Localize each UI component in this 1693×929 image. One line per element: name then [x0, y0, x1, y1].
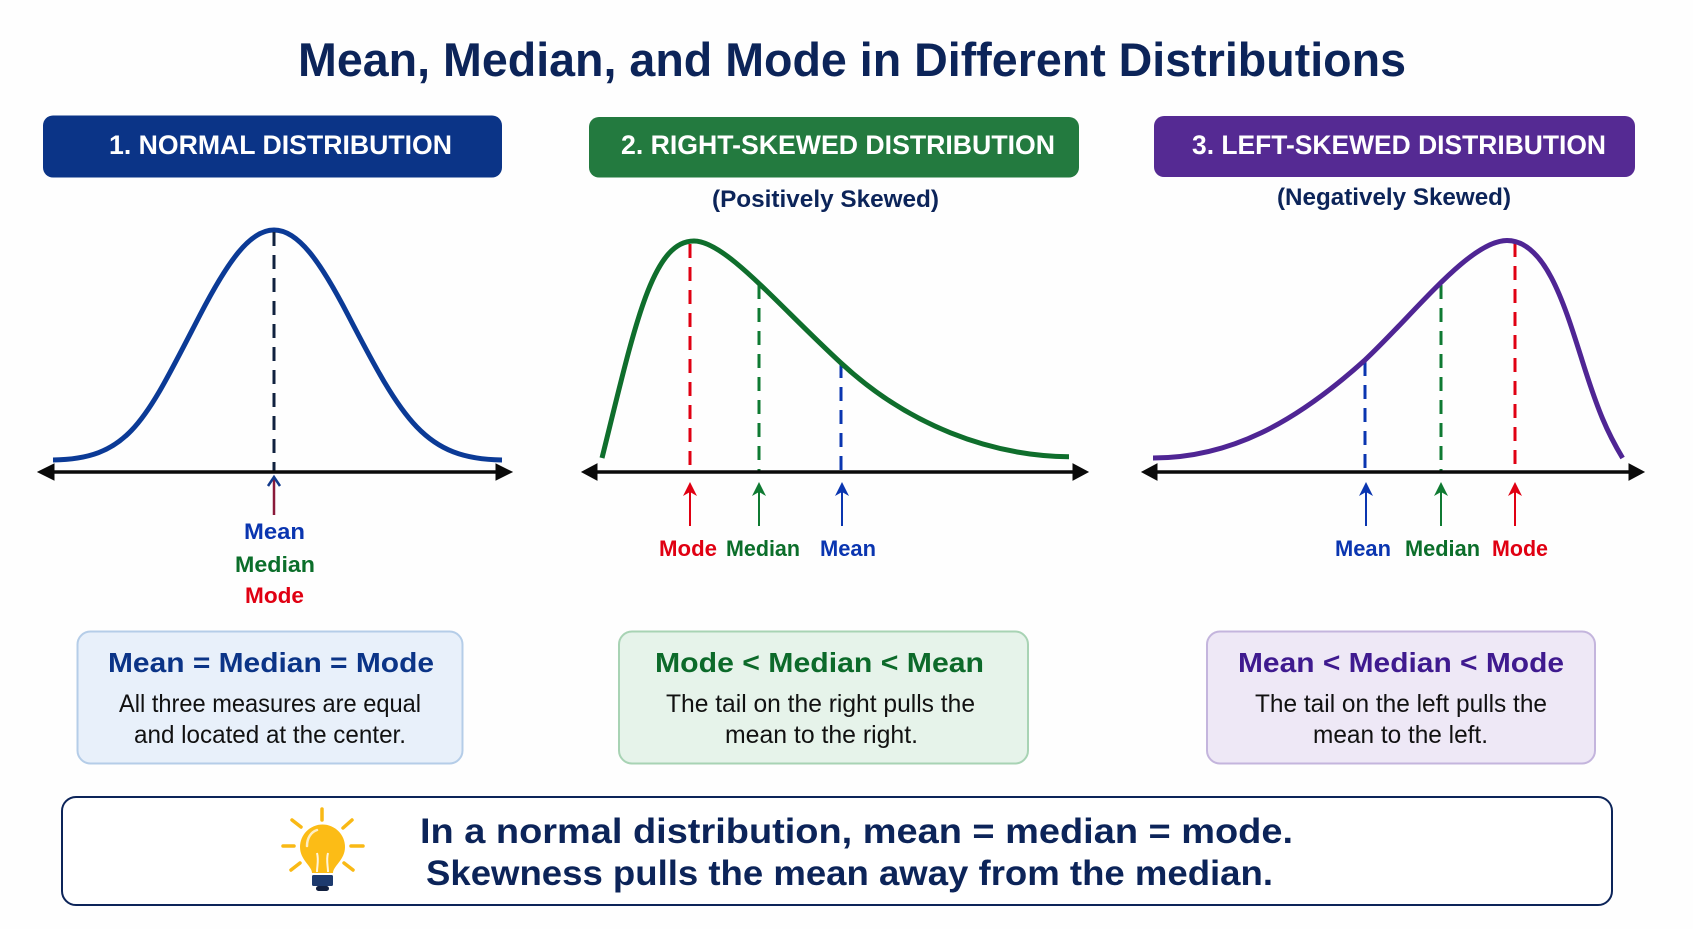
icon: light bulb: [283, 809, 363, 891]
labels: mean median mode: Median: [1405, 536, 1480, 561]
panel: left-skewed distribution: [1142, 116, 1644, 764]
chart: left-skewed curve: [1142, 240, 1644, 480]
callout: mode less than median less than mean: Mode < Median < Mean: [655, 647, 984, 678]
labels: mode median mean: [659, 536, 876, 561]
callout: mean less than median less than mode: mean to the left.: [1313, 721, 1488, 749]
callout: mode less than median less than mean: mean to the right.: [725, 721, 918, 749]
heading: normal distribution: 1. NORMAL DISTRIBUTION: [109, 130, 452, 160]
labels: mode median mean: Mode: [659, 536, 717, 561]
text: takeaway message: Skewness pulls the mean away from the median.: [426, 854, 1273, 893]
heading: right-skewed distribution: [589, 117, 1079, 178]
heading: normal distribution: [43, 116, 502, 178]
heading: left-skewed distribution: [1154, 116, 1635, 177]
callout: mean equals median equals mode: All three measures are equal: [119, 690, 421, 718]
labels: mean median mode: Mean: [244, 519, 305, 544]
callout: mean less than median less than mode: The tail on the left pulls the: [1255, 690, 1547, 718]
title: Mean, Median, and Mode in Different Distributions: [298, 33, 1406, 86]
callout: mode less than median less than mean: [619, 632, 1028, 764]
banner: key takeaway: [62, 797, 1612, 905]
callout: mean equals median equals mode: and located at the center.: [134, 721, 406, 749]
labels: mean median mode: [235, 519, 315, 608]
panel: right-skewed distribution: [582, 117, 1088, 764]
arrows: mean median mode: [1359, 482, 1522, 526]
text: takeaway message: [420, 812, 1293, 893]
callout: mean equals median equals mode: [78, 632, 462, 764]
panel: normal distribution: [38, 116, 512, 764]
labels: mean median mode: Median: [235, 552, 315, 577]
labels: mode median mean: Median: [726, 536, 800, 561]
chart: normal curve: [38, 230, 512, 480]
subtitle: negatively skewed: (Negatively Skewed): [1277, 184, 1511, 211]
callout: mean less than median less than mode: [1207, 632, 1595, 764]
callout: mean equals median equals mode: Mean = Median = Mode: [108, 647, 434, 678]
labels: mean median mode: Mode: [245, 583, 304, 608]
heading: right-skewed distribution: 2. RIGHT-SKEWED DISTRIBUTION: [621, 130, 1055, 160]
labels: mean median mode: [1335, 536, 1548, 561]
labels: mean median mode: Mode: [1492, 536, 1548, 561]
text: takeaway message: In a normal distribution, mean = median = mode.: [420, 812, 1293, 851]
labels: mean median mode: Mean: [1335, 536, 1391, 561]
labels: mode median mean: Mean: [820, 536, 876, 561]
subtitle: positively skewed: (Positively Skewed): [712, 186, 939, 213]
arrows: mode median mean: [683, 482, 849, 526]
callout: mean less than median less than mode: Mean < Median < Mode: [1238, 647, 1564, 678]
arrow: shared marker: [268, 477, 280, 515]
callout: mode less than median less than mean: The tail on the right pulls the: [666, 690, 975, 718]
heading: left-skewed distribution: 3. LEFT-SKEWED DISTRIBUTION: [1192, 130, 1606, 160]
chart: right-skewed curve: [582, 241, 1088, 480]
